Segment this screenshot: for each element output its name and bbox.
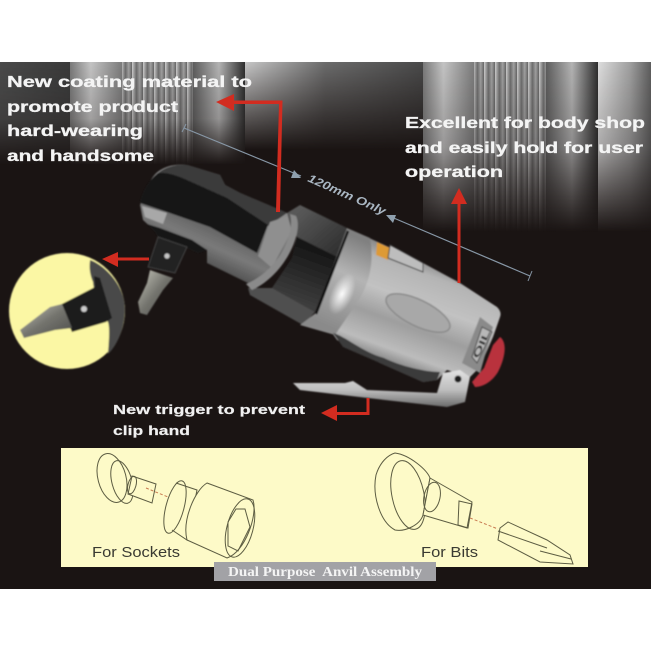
- caption bar: [214, 562, 436, 581]
- tool hex nut: [248, 205, 347, 325]
- tool collar ring: [246, 214, 298, 290]
- panel: dual purpose anvil assembly: [61, 448, 588, 581]
- inset anvil: [60, 276, 112, 332]
- tool head top: [156, 165, 287, 226]
- red arrow to body text: [451, 188, 467, 283]
- callout: coating: [7, 74, 252, 165]
- socket assembly drawing: [92, 450, 260, 560]
- tool oval badge: [381, 286, 455, 340]
- callout: coating: promote product: [7, 99, 178, 116]
- inset bit: [20, 304, 72, 338]
- callout: body shop: Excellent for body shop: [405, 115, 645, 132]
- background metallic stripes, left set: [0, 62, 245, 167]
- tool head light facet: [142, 206, 167, 224]
- callout: coating: hard-wearing: [7, 123, 143, 140]
- tool aluminium body: [330, 236, 501, 382]
- tool neck: [140, 165, 300, 284]
- tool body highlight: [323, 269, 361, 319]
- callout: trigger: [113, 402, 306, 438]
- callout: trigger: New trigger to prevent: [113, 402, 306, 417]
- callout: body shop: [405, 115, 645, 181]
- inset circle: bit close-up: [9, 253, 125, 369]
- dimension line with 120mm label: [182, 124, 532, 281]
- red arrow to trigger text: [321, 398, 370, 421]
- tool body underside: [333, 333, 440, 382]
- tool anvil square: [148, 237, 187, 273]
- tool neck highlight: [258, 216, 296, 268]
- caption bar: Dual Purpose Anvil Assembly: [228, 564, 422, 579]
- background metallic glow, centre: [245, 62, 423, 152]
- callout: coating: New coating material to: [7, 74, 252, 91]
- tool front band: [300, 228, 372, 335]
- red arrow to coating text: [216, 94, 282, 212]
- label: for bits: For Bits: [421, 544, 478, 561]
- callout: body shop: operation: [405, 164, 503, 181]
- callout: trigger: clip hand: [113, 423, 190, 438]
- tool bit: [138, 270, 173, 315]
- tool red rear cap: [472, 337, 505, 387]
- red arrow to inset: [102, 252, 149, 267]
- callout: body shop: and easily hold for user: [405, 140, 643, 157]
- inset tool head: [90, 260, 125, 354]
- callout: coating: and handsome: [7, 148, 154, 165]
- tool trigger lever: [293, 370, 470, 407]
- background metallic stripes, right set: [423, 62, 651, 232]
- label: for sockets: For Sockets: [92, 544, 180, 561]
- tool head recesses: [147, 224, 207, 253]
- tool hex-to-body black ring: [316, 231, 348, 314]
- ratchet tool: [138, 165, 505, 407]
- bit assembly drawing: [375, 453, 573, 564]
- tool oil cap: OIL: [471, 328, 493, 360]
- dimension line with 120mm label: 120mm Only: [306, 173, 388, 218]
- tool black head cap: [140, 173, 268, 253]
- tool oil cap: [462, 317, 493, 373]
- tool warning label: [376, 242, 423, 272]
